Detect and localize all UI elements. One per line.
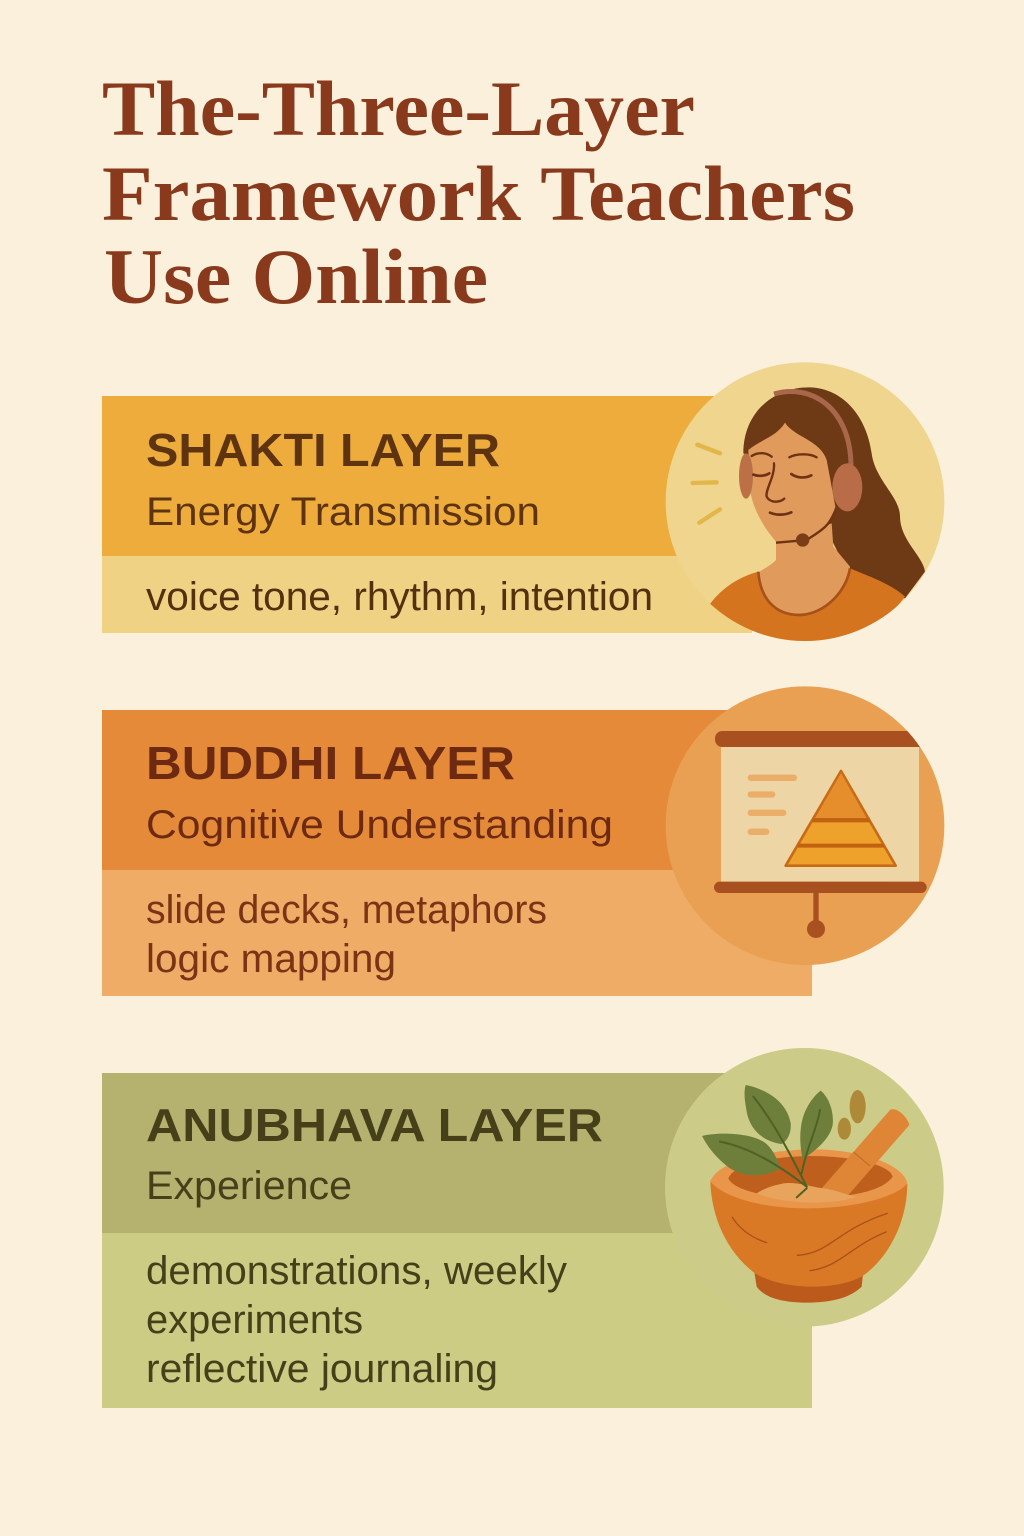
detail text: voice tone, rhythm, intention (146, 575, 653, 619)
detail text: experiments (146, 1298, 363, 1342)
title (102, 65, 855, 320)
header band (102, 710, 728, 870)
icon: teacher with headset (666, 362, 944, 643)
subheading: experience: Experience (146, 1164, 352, 1208)
heading: Shakti layer: SHAKTI LAYER (146, 424, 500, 476)
subheading: energy transmission: Energy Transmission (146, 490, 540, 534)
header band (102, 1073, 728, 1233)
subheading: cognitive understanding: Cognitive Understanding (146, 803, 613, 847)
title: Use Online (104, 233, 488, 320)
heading: Buddhi layer: BUDDHI LAYER (146, 737, 515, 789)
heading: Anubhava layer: ANUBHAVA LAYER (146, 1099, 603, 1151)
icon: mortar, pestle and herbs (665, 1048, 944, 1327)
detail text: logic mapping (146, 937, 396, 981)
title: Framework Teachers (102, 150, 855, 237)
header band (102, 396, 714, 556)
panel: Shakti layer (102, 362, 944, 643)
detail band (102, 556, 752, 633)
title: The-Three-Layer (102, 65, 695, 152)
panel: Buddhi layer (102, 686, 944, 996)
infographic canvas (102, 80, 944, 1408)
detail text: demonstrations, weekly (146, 1249, 567, 1293)
detail text: reflective journaling (146, 1347, 498, 1391)
detail text (146, 1249, 567, 1391)
detail text (146, 888, 547, 981)
detail band (102, 1233, 812, 1408)
detail band (102, 870, 812, 996)
icon: presentation screen with pyramid (666, 686, 944, 965)
detail text: slide decks, metaphors (146, 888, 547, 932)
panel: Anubhava layer (102, 1048, 944, 1408)
